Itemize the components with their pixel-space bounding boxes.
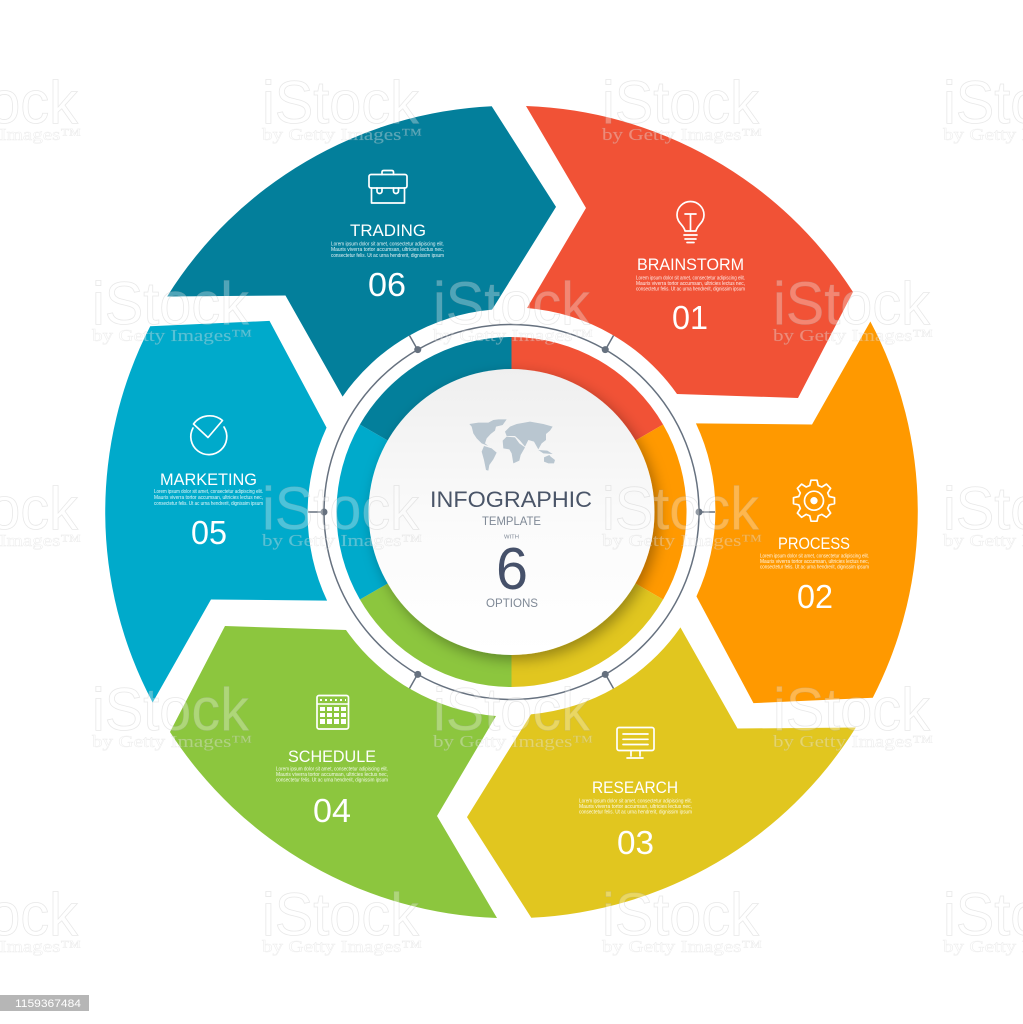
stock watermarks: by Getty Images™: [92, 326, 252, 345]
description: Mauris viverra tortor accumsan, ultricies lectus nec,: [154, 495, 263, 501]
description: [154, 489, 263, 507]
stock watermarks: by Getty Images™: [773, 732, 933, 751]
icon: calendar: [317, 696, 348, 729]
number: 06: [368, 266, 406, 303]
stock watermarks: by Getty Images™: [433, 326, 593, 345]
description: consectetur felis. Ut ac urna hendrerit, dignissim ipsum: [760, 564, 869, 570]
colored inner ring: [336, 337, 687, 687]
grey outer ring with ticks: [308, 324, 715, 700]
stock watermarks: iStock: [262, 475, 420, 542]
segment: yellow arrow: [439, 582, 856, 1011]
description: Lorem ipsum dolor sit amet, consectetur adipiscing elit.: [579, 798, 692, 804]
segment: green arrow: [170, 626, 497, 918]
description: consectetur felis. Ut ac urna hendrerit, dignissim ipsum: [331, 253, 444, 259]
title: TRADING: [350, 221, 426, 240]
stock watermarks: by Getty Images™: [602, 125, 762, 144]
heading: INFOGRAPHIC: [430, 487, 592, 512]
stock watermarks: iStock: [602, 475, 760, 542]
number: 01: [672, 299, 708, 336]
panel: 01 brainstorm: [526, 106, 853, 398]
stock watermarks: iStock: [92, 270, 250, 337]
stock watermarks: iStock: [602, 881, 760, 948]
description: [331, 242, 444, 259]
number: 03: [617, 824, 654, 861]
stock watermarks: by Getty Images™: [602, 937, 762, 956]
segment: blue arrow: [0, 273, 406, 702]
description: Mauris viverra tortor accumsan, ultricies lectus nec,: [276, 772, 388, 778]
stock watermarks: iStock: [602, 69, 760, 136]
description: consectetur felis. Ut ac urna hendrerit, dignissim ipsum: [579, 810, 692, 816]
stock watermarks: by Getty Images™: [262, 937, 422, 956]
title: SCHEDULE: [288, 747, 376, 766]
description: Mauris viverra tortor accumsan, ultricies lectus nec,: [331, 247, 444, 253]
stock watermarks: by Getty Images™: [262, 531, 422, 550]
description: consectetur felis. Ut ac urna hendrerit, dignissim ipsum: [276, 778, 388, 784]
panel: 02 process: [617, 322, 1023, 751]
title: BRAINSTORM: [637, 255, 744, 274]
big number: 6: [496, 536, 528, 602]
stock watermarks: by Getty Images™: [433, 732, 593, 751]
icon: monitor: [617, 728, 654, 758]
description: Lorem ipsum dolor sit amet, consectetur adipiscing elit.: [636, 276, 745, 282]
panel: 05 marketing: [0, 273, 406, 702]
title: RESEARCH: [592, 778, 678, 797]
subheading: TEMPLATE: [482, 514, 541, 528]
description: Lorem ipsum dolor sit amet, consectetur adipiscing elit.: [760, 554, 869, 560]
stock watermarks: by Getty Images™: [262, 125, 422, 144]
description: Lorem ipsum dolor sit amet, consectetur adipiscing elit.: [331, 242, 444, 248]
image id tag: 1159367484: [15, 998, 81, 1010]
icon: light bulb: [677, 202, 704, 242]
segment: orange arrow: [617, 322, 1023, 751]
description: [276, 766, 388, 784]
title: MARKETING: [160, 470, 257, 489]
segment: teal arrow: [167, 13, 584, 442]
stock watermarks: by Getty Images™: [602, 531, 762, 550]
description: [579, 798, 692, 816]
with label: WITH: [504, 534, 519, 540]
description: [636, 276, 745, 292]
icon: world map: [469, 419, 555, 471]
panel: 06 trading: [167, 13, 584, 442]
description: Mauris viverra tortor accumsan, ultricies lectus nec,: [579, 804, 692, 810]
segment: red arrow: [526, 106, 853, 398]
icon: gear: [794, 480, 834, 521]
stock watermarks: iStock: [262, 69, 420, 136]
options label: OPTIONS: [486, 596, 538, 610]
stock watermarks: iStock: [262, 881, 420, 948]
stock watermarks: by Getty Images™: [773, 326, 933, 345]
description: Lorem ipsum dolor sit amet, consectetur adipiscing elit.: [154, 489, 263, 495]
panel: 03 research: [439, 582, 856, 1011]
number: 04: [313, 792, 351, 829]
panel: 04 schedule: [170, 626, 497, 918]
stock watermarks: by Getty Images™: [92, 732, 252, 751]
center circle: [368, 369, 654, 655]
icon: briefcase: [369, 170, 407, 203]
icon: pie chart: [191, 416, 227, 455]
stock watermarks: iStock: [773, 676, 931, 743]
stock watermarks: iStock: [433, 676, 591, 743]
description: Mauris viverra tortor accumsan, ultricies lectus nec,: [636, 281, 745, 287]
description: [760, 554, 869, 570]
title: PROCESS: [778, 534, 850, 553]
description: consectetur felis. Ut ac urna hendrerit, dignissim ipsum: [154, 501, 263, 507]
description: Mauris viverra tortor accumsan, ultricies lectus nec,: [760, 559, 869, 565]
image id tag: [0, 995, 89, 1011]
stock watermarks: iStock: [433, 270, 591, 337]
stock watermarks: iStock: [92, 676, 250, 743]
number: 02: [797, 578, 833, 615]
stock watermarks: iStock: [773, 270, 931, 337]
description: Lorem ipsum dolor sit amet, consectetur adipiscing elit.: [276, 766, 388, 772]
description: consectetur felis. Ut ac urna hendrerit, dignissim ipsum: [636, 286, 745, 292]
number: 05: [191, 514, 227, 551]
